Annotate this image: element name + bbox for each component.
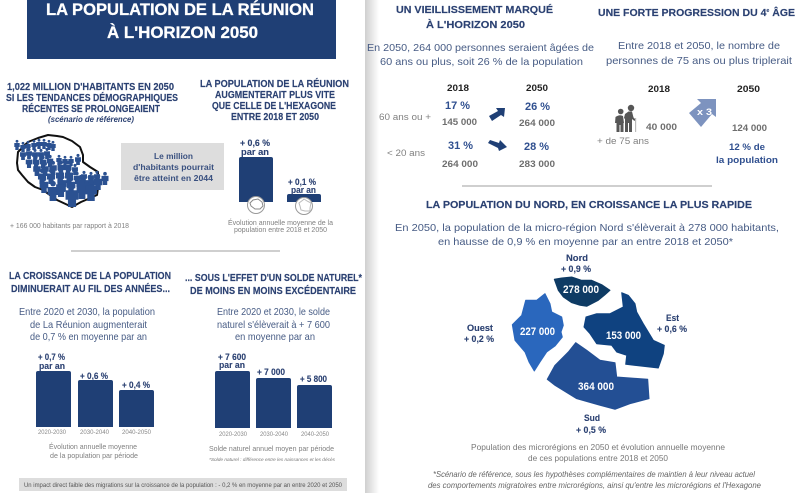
heading: population du Nord: LA POPULATION DU NORD, EN CROISSANCE LA PLUS RAPIDE	[426, 200, 752, 211]
bar chart: Réunion vs Hexagone: par an	[241, 147, 269, 158]
callout: le million d'habitants	[121, 143, 224, 190]
heading: croissance diminuerait: DIMINUERAIT AU FIL DES ANNÉES...	[11, 282, 170, 295]
bar chart: Réunion vs Hexagone: + 0,1 %	[288, 177, 316, 188]
bar chart: solde naturel par période	[215, 352, 332, 438]
bar chart: évolution annuelle par période	[36, 352, 154, 436]
caption: évolution annuelle 2018-2050	[228, 218, 334, 234]
table: structure par âge: 26 %	[525, 101, 550, 113]
heading: 1,022 million d'habitants: 1,022 MILLION D'HABITANTS EN 2050	[7, 82, 174, 93]
text: solde naturel 2020-2030: Entre 2020 et 2030, le solde	[217, 306, 330, 318]
heading: 1,022 million d'habitants	[6, 82, 178, 124]
caption: évolution par période: de la population par période	[50, 451, 138, 460]
label: Nord: Nord	[566, 253, 588, 264]
label: Est: Est	[666, 313, 680, 324]
table: structure par âge: 31 %	[448, 140, 473, 152]
bar chart: évolution annuelle par période: 2030-2040	[80, 430, 110, 436]
text: vieillissement: En 2050, 264 000 personnes seraient âgées de	[367, 42, 594, 54]
note: scénario de référence	[428, 469, 761, 490]
table: quatrième âge: 2018	[648, 84, 670, 95]
table: structure par âge: 283 000	[519, 159, 555, 170]
text: vieillissement	[367, 42, 594, 68]
text: micro-région Nord: en hausse de 0,9 % en moyenne par an entre 2018 et 2050*	[438, 236, 733, 248]
text: quatrième âge: Entre 2018 et 2050, le nombre de	[618, 40, 780, 52]
caption: carte: de ces populations entre 2018 et 2050	[528, 453, 668, 463]
arrow: baisse des moins de 20 ans	[488, 140, 507, 151]
table: structure par âge: 28 %	[524, 141, 549, 153]
arrow: multiplication par trois	[689, 99, 716, 127]
label: Nord: + 0,9 %	[561, 264, 592, 275]
bar chart: solde naturel par période: 2030-2040	[260, 432, 289, 438]
region: Nord	[554, 277, 610, 306]
table: structure par âge: 2050	[526, 83, 548, 94]
bar chart: évolution annuelle par période: par an	[39, 361, 65, 372]
table: quatrième âge	[597, 84, 778, 166]
label: Sud: Sud	[584, 413, 600, 424]
heading: vieillissement: À L'HORIZON 2050	[426, 18, 525, 31]
title banner: LA POPULATION DE LA RÉUNION	[46, 0, 314, 19]
text: croissance 2020-2030: Entre 2020 et 2030, la population	[19, 306, 155, 318]
heading: croissance diminuerait: LA CROISSANCE DE LA POPULATION	[9, 271, 171, 282]
note: définition du solde naturel: *Solde naturel : différence entre les naissances et les décès	[209, 457, 336, 463]
heading: croissance comparée à l'Hexagone: LA POPULATION DE LA RÉUNION	[200, 77, 349, 90]
title banner: À L'HORIZON 2050	[107, 23, 258, 42]
callout: impact des migrations: Un impact direct faible des migrations sur la croissance de la population : - 0,2 % en moyenne par an entre 2020 et 2050	[24, 483, 343, 489]
label: Nord	[561, 253, 592, 275]
table: structure par âge: 264 000	[519, 118, 555, 129]
text: solde naturel 2020-2030	[217, 306, 330, 343]
heading: croissance comparée à l'Hexagone: AUGMENTERAIT PLUS VITE	[215, 90, 335, 101]
label: Est	[657, 313, 688, 335]
text: vieillissement: 60 ans ou plus, soit 26 % de la population	[380, 56, 583, 68]
icon: island outline with crowd	[14, 135, 109, 207]
bar chart: Réunion vs Hexagone	[239, 138, 321, 214]
text: croissance 2020-2030: de La Réunion augmenterait	[30, 319, 147, 331]
heading: croissance comparée à l'Hexagone	[200, 77, 349, 123]
region: Ouest: 227 000	[520, 326, 555, 338]
bar chart: évolution annuelle par période: + 0,6 %	[80, 371, 108, 382]
region: Sud: 364 000	[578, 381, 614, 393]
heading: 1,022 million d'habitants: (scénario de référence)	[48, 115, 134, 124]
text: croissance 2020-2030: de 0,7 % en moyenne par an	[30, 331, 147, 343]
label: Est: + 0,6 %	[657, 324, 688, 335]
table: quatrième âge: 2050	[737, 84, 760, 95]
region: Ouest	[512, 294, 563, 371]
callout: le million d'habitants: être atteint en 2044	[134, 173, 213, 183]
table: structure par âge: < 20 ans	[387, 148, 426, 158]
bar chart: solde naturel par période: + 7 000	[257, 367, 285, 378]
bar chart: évolution annuelle par période: + 0,7 %	[38, 352, 65, 363]
arrow: hausse des 60 ans ou plus	[489, 108, 505, 121]
caption: solde naturel annuel: Solde naturel annuel moyen par période	[209, 444, 334, 453]
heading: croissance comparée à l'Hexagone: ENTRE 2018 ET 2050	[231, 112, 319, 123]
table: quatrième âge: 124 000	[732, 123, 767, 134]
bar chart: Réunion vs Hexagone: + 0,6 %	[240, 138, 271, 149]
text: micro-région Nord	[395, 222, 779, 248]
caption: évolution par période: Évolution annuelle moyenne	[49, 442, 137, 451]
table: structure par âge: 264 000	[442, 159, 478, 170]
label: Ouest	[464, 323, 495, 345]
text: solde naturel 2020-2030: en moyenne par an	[235, 331, 315, 343]
table: structure par âge	[379, 83, 555, 170]
region: Sud	[547, 343, 649, 409]
label: Sud	[576, 413, 607, 436]
heading: croissance diminuerait	[9, 271, 171, 295]
caption: habitants supplémentaires: + 166 000 habitants par rapport à 2018	[10, 221, 129, 230]
callout: impact des migrations	[19, 478, 347, 491]
bar chart: Réunion vs Hexagone: par an	[291, 185, 316, 196]
table: quatrième âge: la population	[716, 155, 778, 166]
text: solde naturel 2020-2030: naturel s'élèverait à + 7 600	[217, 319, 330, 331]
heading: 1,022 million d'habitants: RÉCENTES SE PROLONGEAIENT	[22, 102, 160, 115]
table: structure par âge: 60 ans ou +	[379, 112, 431, 122]
table: quatrième âge: 40 000	[646, 122, 677, 133]
caption: carte	[471, 442, 725, 463]
heading: quatrième âge: UNE FORTE PROGRESSION DU 4	[598, 8, 759, 19]
table: structure par âge: 2018	[447, 83, 469, 94]
table: structure par âge: 17 %	[445, 100, 470, 112]
region: Est	[584, 293, 664, 368]
heading: solde naturel: ... SOUS L'EFFET D'UN SOLDE NATUREL*	[185, 273, 362, 284]
heading: croissance comparée à l'Hexagone: QUE CELLE DE L'HEXAGONE	[212, 101, 336, 112]
heading: quatrième âge: e	[766, 8, 770, 14]
map: microrégions	[512, 277, 664, 409]
title banner	[27, 0, 336, 59]
label: Ouest: Ouest	[467, 323, 494, 334]
caption: évolution annuelle 2018-2050: Évolution annuelle moyenne de la	[228, 218, 334, 227]
heading: solde naturel: DE MOINS EN MOINS EXCÉDENTAIRE	[190, 284, 356, 297]
region: Nord: 278 000	[563, 284, 599, 296]
heading: quatrième âge: ÂGE	[769, 6, 795, 19]
bar chart: solde naturel par période: par an	[219, 360, 245, 371]
caption: carte: Population des microrégions en 2050 et évolution annuelle moyenne	[471, 442, 725, 452]
arrow: multiplication par trois: x 3	[697, 107, 712, 117]
bar chart: solde naturel par période: 2040-2050	[301, 432, 330, 438]
bar chart: solde naturel par période: 2020-2030	[219, 432, 248, 438]
text: croissance 2020-2030	[19, 306, 155, 343]
caption: évolution annuelle 2018-2050: population entre 2018 et 2050	[234, 225, 327, 234]
table: structure par âge: 145 000	[442, 117, 477, 128]
label: Sud: + 0,5 %	[576, 425, 607, 436]
table: quatrième âge: + de 75 ans	[597, 136, 650, 146]
text: micro-région Nord: En 2050, la population de la micro-région Nord s'élèverait à 278 000 habitants,	[395, 222, 779, 234]
callout: le million d'habitants: d'habitants pourrait	[133, 162, 214, 172]
bar chart: solde naturel par période: + 7 600	[218, 352, 246, 363]
icon: couple âgé	[615, 105, 636, 132]
callout: le million d'habitants: Le million	[154, 151, 193, 161]
bar chart: solde naturel par période: + 5 800	[300, 374, 327, 385]
text: quatrième âge	[606, 40, 792, 67]
heading: solde naturel	[185, 273, 362, 297]
bar chart: évolution annuelle par période: 2040-2050	[122, 430, 152, 436]
label: Ouest: + 0,2 %	[464, 334, 495, 345]
heading: 1,022 million d'habitants: SI LES TENDANCES DÉMOGRAPHIQUES	[6, 91, 178, 104]
text: quatrième âge: personnes de 75 ans ou plus triplerait	[606, 55, 792, 67]
note: scénario de référence: des comportements migratoires entre microrégions, ainsi qu'entre les microrégions et l'Hexagone	[428, 480, 761, 490]
heading: vieillissement: UN VIEILLISSEMENT MARQUÉ	[396, 3, 553, 16]
bar chart: évolution annuelle par période: + 0,4 %	[122, 380, 150, 391]
table: quatrième âge: 12 % de	[729, 142, 765, 153]
note: scénario de référence: *Scénario de référence, sous les hypothèses complémentaires de maintien à leur niveau actuel	[433, 469, 756, 479]
region: Est: 153 000	[606, 330, 641, 342]
bar chart: évolution annuelle par période: 2020-2030	[38, 430, 67, 436]
heading: vieillissement	[396, 3, 553, 31]
caption: évolution par période	[49, 442, 138, 460]
